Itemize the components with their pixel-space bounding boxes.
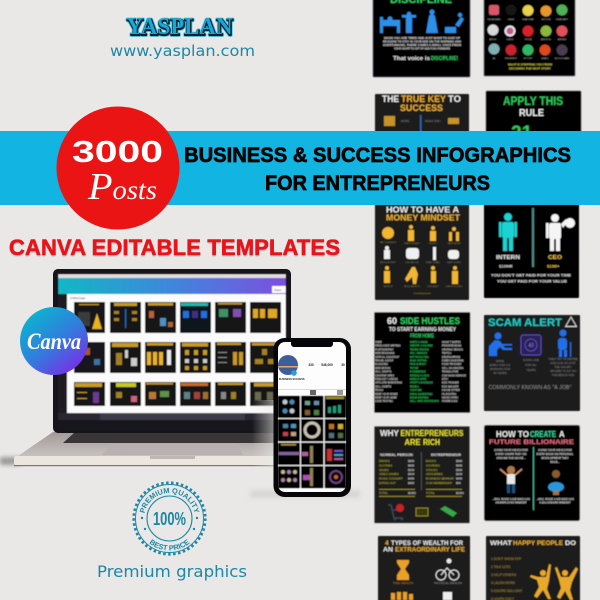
infographic card: why entrepreneurs are rich: $300 — [456, 459, 463, 463]
infographic card: why entrepreneurs are rich: $300 — [408, 464, 415, 468]
infographic card: 60 side hustles: SELL EBOOKS — [410, 352, 427, 355]
infographic card: money mindset: GIVE BACK — [427, 285, 439, 288]
infographic card: what happy people do: HAPPY PEOPLE — [513, 540, 563, 547]
infographic card: future billionaire: HOW TO — [496, 430, 529, 439]
icon: jumping people — [530, 564, 578, 600]
icon: cart — [388, 504, 404, 520]
infographic card: app icons: SLACK — [506, 38, 514, 41]
infographic card: true key to success: WHILE THEY — [425, 119, 441, 123]
infographic card: types of wealth: EXTRAORDINARY LIFE — [395, 546, 466, 554]
infographic card: why entrepreneurs are rich: NORMAL PERSON — [380, 453, 414, 457]
icon: canva circle logo: Canva — [27, 329, 81, 354]
laptop mockup — [0, 269, 292, 466]
phone mockup: BUSINESS SUCCESS — [279, 378, 305, 381]
profile stats — [308, 363, 345, 367]
infographic card: 60 side hustles: PODCAST / VIDEOS — [375, 378, 398, 381]
infographic card: true key to success: THE — [382, 94, 399, 105]
infographic card: scam alert: DOING JOB — [523, 358, 539, 362]
phone mockup — [250, 338, 360, 498]
infographic card: scam alert: THE SALARY — [554, 365, 572, 369]
infographic card: why entrepreneurs are rich: $200 — [408, 459, 415, 463]
infographic card: 60 side hustles: DOG WALKER — [442, 385, 459, 388]
infographic card: 60 side hustles: DROPSHIPPING — [442, 356, 460, 359]
infographic card: what happy people do: 1.DON'T SHOW OFF — [491, 557, 521, 561]
infographic card: 60 side hustles: FREELANCE WRITING — [375, 345, 401, 348]
infographic card: money mindset: BUILD ASSETS — [404, 285, 420, 288]
infographic card: 60 side hustles: MOBILE APPS — [410, 378, 427, 381]
heading: canva editable templates: CANVA EDITABLE TEMPLATES — [9, 236, 340, 262]
infographic card: why entrepreneurs are rich: $50 — [456, 481, 461, 485]
infographic card: 60 side hustles: WEB DESIGNING — [375, 352, 395, 355]
infographic card: why entrepreneurs are rich: TOTAL — [379, 491, 388, 495]
infographic card: discipline: That voice is — [393, 56, 430, 62]
logo: yasplan: YASPLAN — [127, 15, 233, 41]
thumbnail row 3 — [74, 382, 281, 406]
laptop screen: Share — [274, 288, 282, 292]
infographic card: scam alert: AFFORD TO SIT ON — [550, 369, 576, 373]
infographic card: future billionaire: GIVING YOUR KID $10 FOR — [538, 448, 572, 452]
infographic card: types of wealth: 4 — [385, 540, 389, 547]
infographic card: 60 side hustles: PAID SURVEY — [410, 363, 426, 366]
icon: ceo — [546, 214, 575, 251]
infographic card: 60 side hustles: NFT ROYALTIES — [410, 356, 429, 359]
infographic card: 60 side hustles: PHOTOGRAPHY — [375, 348, 394, 351]
infographic card: 60 side hustles: FOREX INVESTING — [442, 360, 464, 362]
infographic card: types of wealth: TYPES OF WEALTH FOR — [391, 540, 463, 547]
infographic card: future billionaire: AN EMPLOYEE MINDSET — [495, 500, 527, 504]
infographic card: 60 side hustles: FILM EXTRA — [442, 393, 457, 396]
infographic card: true key to success: TO — [448, 94, 461, 105]
heading: canva editable templates: CANVA EDITABLE TEMPLATES — [9, 235, 340, 260]
infographic card: discipline: WHEN YOU ARE TIRED AND JUST WANT TO GIVE UP — [384, 36, 460, 40]
profile stats: 330 — [308, 363, 314, 367]
infographic card: intern vs ceo: CEO — [548, 255, 563, 261]
infographic card: app icons: PINTEREST — [505, 58, 518, 60]
dock — [100, 413, 245, 420]
infographic card: what happy people do: 5.IGNORE BULLSHIT — [491, 589, 522, 593]
infographic card: why entrepreneurs are rich: DRINKS — [379, 459, 390, 463]
infographic card: 60 side hustles: CAR WASH SERVICE — [442, 374, 467, 377]
infographic card: why entrepreneurs are rich: VIDEO GAMES — [379, 472, 399, 476]
infographic card: future billionaire: CREATE — [530, 430, 556, 439]
infographic card: 60 side hustles: FOOD TRUCKER — [442, 363, 462, 366]
infographic card: money mindset — [375, 204, 469, 300]
infographic card: scam alert: YEARS — [526, 368, 536, 372]
icon: canva circle logo — [20, 307, 88, 375]
infographic card: discipline — [373, 0, 470, 77]
laptop lid — [53, 269, 291, 433]
caption: premium graphics: Premium graphics — [97, 562, 247, 581]
infographic card: apply this rule: RULE — [519, 107, 544, 119]
infographic card: app icons: ANDROID — [541, 38, 551, 41]
infographic card: why entrepreneurs are rich: SHOES — [379, 468, 389, 472]
infographic card: 60 side hustles: PROOFREADING — [442, 345, 462, 348]
infographic card: future billionaire: AROUND THE HOUSE... — [496, 456, 526, 460]
infographic card: why entrepreneurs are rich: $300 — [456, 468, 463, 472]
infographic card: scam alert: COMMONLY KNOWN AS "A JOB" — [488, 385, 572, 391]
infographic card: future billionaire: READ... — [550, 460, 560, 464]
icon: reading boy — [548, 470, 564, 495]
infographic card: 60 side hustles: MAKE T-SHIRTS — [442, 341, 461, 344]
badge: premium quality seal: 100% — [153, 509, 186, 529]
infographic card: true key to success: TRUE KEY — [401, 94, 447, 105]
infographic card: 60 side hustles: TEACH — [375, 389, 384, 392]
infographic card: 60 side hustles: SELL ASSETS — [375, 385, 392, 388]
infographic card: why entrepreneurs are rich: $300 — [456, 464, 463, 468]
infographic card: scam alert: 40 YEARS — [493, 371, 507, 375]
infographic card: 60 side hustles: ETSY — [442, 378, 449, 381]
infographic card: why entrepreneurs are rich: STOCKS — [426, 468, 438, 472]
infographic card: future billionaire: ...WILL RAISE A KID WHO HAS — [536, 497, 574, 501]
infographic card: 60 side hustles: CODE TESTING — [375, 400, 393, 403]
infographic card: money mindset: HOW TO HAVE A — [386, 206, 459, 214]
logo: yasplan: YASPLAN — [127, 15, 233, 41]
banner heading: FOR ENTREPRENEURS — [265, 171, 490, 195]
infographic card: discipline: DISCIPLINE! — [431, 56, 458, 62]
infographic card: 60 side hustles: DESIGN A LOGO — [410, 374, 429, 377]
infographic card: why entrepreneurs are rich: $400 — [456, 476, 463, 480]
infographic card: app icons: BITCOIN — [542, 19, 551, 21]
infographic card: intern vs ceo — [484, 204, 579, 298]
infographic card: scam alert: SCAM ALERT — [488, 317, 562, 329]
infographic card: true key to success: WORK... — [401, 119, 412, 123]
infographic card: money mindset: START SMALL — [426, 261, 441, 264]
infographic card: scam alert — [484, 315, 580, 411]
infographic card: true key to success — [375, 94, 469, 139]
infographic card: intern vs ceo: $10/HR — [499, 264, 513, 268]
infographic card: why entrepreneurs are rich: ENTREPRENEURS — [400, 429, 464, 438]
infographic card: 60 side hustles: ECOMMERCE — [410, 371, 426, 374]
infographic card: 60 side hustles: UBER — [375, 341, 382, 344]
infographic card: what happy people do: 2.TALK LESS — [491, 565, 510, 569]
infographic card: future billionaire: EVERY BOOK ON PERSONAL — [537, 452, 574, 456]
infographic card: 60 side hustles: AFFILIATE MARKETING — [375, 382, 402, 385]
infographic card: 60 side hustles: VIRTUAL ASSISTANT — [375, 356, 400, 359]
infographic card: 60 side hustles: RENT YOUR HOME — [375, 396, 397, 400]
infographic card: 60 side hustles: TO START EARNING MONEY — [389, 327, 457, 333]
infographic card: why entrepreneurs are rich: EATING OUT — [379, 481, 396, 485]
infographic card: true key to success: SUCCESS — [400, 103, 443, 114]
infographic card: 60 side hustles: FROM HOME — [410, 334, 435, 340]
infographic card: intern vs ceo: $10M+ — [547, 264, 560, 268]
infographic card: discipline: REASONS TO STAY IN YOUR BED ON THE MORNING AND — [383, 40, 461, 44]
phone post grid — [278, 396, 346, 488]
infographic card: why entrepreneurs are rich — [374, 426, 470, 524]
profile stats: 546,000 — [321, 363, 333, 367]
infographic card: why entrepreneurs are rich: BOOKS — [426, 459, 436, 463]
infographic card: scam alert: WORKING FOR — [490, 367, 510, 371]
infographic card: 60 side hustles: TUTOR — [410, 367, 418, 370]
infographic card: 60 side hustles: CONTENT SITES — [375, 374, 395, 377]
infographic card: 60 side hustles: WRITE A BOOK — [410, 341, 428, 344]
infographic card: app icons: BECOMING THE NEXT STORY — [509, 66, 551, 70]
infographic card: what happy people do: 4.LAUGH MORE — [491, 581, 515, 585]
website url: www.yasplan.com — [110, 42, 255, 60]
thumbnail row 1 — [74, 302, 281, 333]
infographic card: 60 side hustles: GRAPHIC DESIGN — [442, 348, 463, 351]
profile picture — [278, 355, 298, 376]
logo: yasplan: YASPLAN — [126, 14, 233, 40]
infographic card: why entrepreneurs are rich: $1450 — [456, 491, 464, 495]
infographic card: why entrepreneurs are rich: $104 — [408, 472, 415, 476]
banner heading: BUSINESS & SUCCESS INFOGRAPHICS — [184, 143, 571, 167]
infographic card: future billionaire: A — [559, 430, 565, 439]
infographic card: why entrepreneurs are rich: RICH — [423, 438, 440, 447]
infographic card: app icons: BEATS — [541, 57, 549, 60]
infographic card: what happy people do: 3.HELP OTHERS — [491, 573, 516, 577]
infographic card: why entrepreneurs are rich: BUSINESS SEMINAR — [426, 476, 454, 480]
infographic card: future billionaire: A BILLIONAIRE MINDSET — [539, 500, 571, 504]
infographic card: why entrepreneurs are rich: $400 — [408, 476, 415, 480]
infographic card: why entrepreneurs are rich: GYM MEMBERSHIP — [426, 481, 452, 485]
infographic card: 60 side hustles: HOUSE SITTER — [442, 389, 460, 392]
infographic card: why entrepreneurs are rich: $100 — [456, 472, 463, 476]
infographic card: money mindset: STAY FOCUSED — [446, 285, 463, 288]
infographic card: money mindset: REDUCE DEBT — [380, 262, 396, 264]
infographic card: future billionaire: EVERY CHORE THEY DO — [496, 452, 526, 456]
infographic card: money mindset: @wealthymindset — [413, 292, 431, 295]
infographic card: app icons: AIRBNB — [558, 38, 567, 41]
laptop base — [15, 432, 290, 458]
infographic card: 60 side hustles: MOVIE CRITIC — [442, 396, 459, 400]
infographic card: 60 side hustles: SELL CRAFTS — [375, 371, 392, 374]
infographic card: app icons: TESLA — [525, 38, 532, 41]
infographic card: types of wealth: AN — [383, 546, 393, 554]
infographic card: scam alert: 40 — [528, 343, 534, 349]
infographic card: 60 side hustles: TRANSLATOR — [442, 371, 459, 374]
laptop shadow — [0, 457, 20, 465]
infographic card: why entrepreneurs are rich: TOTAL — [426, 491, 435, 495]
infographic card: apply this rule: APPLY THIS — [503, 96, 563, 108]
infographic card: 60 side hustles: BABY SITTING — [410, 360, 427, 362]
infographic card: why entrepreneurs are rich: WHY — [380, 429, 400, 438]
infographic card: apply this rule — [486, 91, 581, 144]
infographic card: 60 side hustles: YOUTUBE — [410, 389, 422, 392]
infographic card: scam alert: THE BENCH AND — [552, 373, 574, 377]
infographic card: why entrepreneurs are rich: MUSIC CONCERT — [379, 476, 403, 480]
infographic card: types of wealth: PHYSICAL WEALTH — [434, 581, 462, 585]
thumbnail row 2 — [74, 342, 281, 373]
icon: hourglass — [397, 560, 409, 580]
infographic card: app icons: AI — [493, 57, 495, 60]
infographic card: scam alert: AND LIVE ON JUST — [550, 361, 576, 365]
infographic card: discipline: YOUR HEART TO GET UP AND PUSH FORWARD — [394, 46, 450, 50]
banner heading — [184, 143, 571, 195]
infographic card: money mindset: BE RICH — [384, 286, 393, 288]
infographic card: 60 side hustles: TRAVEL AGENT — [375, 360, 394, 362]
infographic card: 60 side hustles: CREATE A COURSE — [410, 345, 433, 348]
icon: intern — [499, 213, 517, 251]
infographic card: why entrepreneurs are rich: CLOTHES — [379, 464, 392, 468]
infographic card: money mindset: PAY YOURSELF — [380, 241, 397, 244]
infographic card: why entrepreneurs are rich: COURSES — [426, 464, 440, 468]
infographic card: app icons: SNAPCHAT — [522, 18, 535, 21]
infographic card: intern vs ceo: YOU DON'T GET PAID FOR YOUR TIME — [491, 274, 572, 278]
infographic card: money mindset: TRACK MONEY — [404, 242, 421, 245]
infographic card: 60 side hustles: SIDE HUSTLES — [400, 316, 460, 326]
infographic card: 60 side hustles: TRADE STOCKS — [410, 348, 429, 351]
infographic card: money mindset: INVEST — [429, 243, 438, 245]
infographic card: money mindset: LIVE BELOW — [405, 262, 420, 264]
infographic card: intern vs ceo: YOU GET PAID FOR YOUR VALUE — [497, 280, 568, 284]
infographic card: why entrepreneurs are rich: $1450 — [408, 491, 416, 495]
badge: 3000 posts — [56, 106, 180, 230]
infographic card: discipline: OVERTHINKING, THERE COMES A SMALL VOICE FROM — [383, 43, 461, 47]
infographic card: apply this rule: 21 — [511, 123, 533, 144]
badge: 3000 posts: 3000 — [72, 134, 163, 169]
infographic card: types of wealth — [378, 536, 470, 600]
infographic card: why entrepreneurs are rich: ENTREPRENEUR — [431, 453, 462, 457]
icon: cyclist — [436, 568, 459, 580]
infographic card: app icons: SPOTIFY — [523, 58, 533, 60]
badge: premium quality seal: BEST PRICE — [149, 539, 190, 551]
infographic card: app icons: INSTAGRAM — [488, 18, 501, 21]
infographic card: why entrepreneurs are rich: $150 — [408, 468, 415, 472]
badge: premium quality seal — [132, 481, 207, 556]
infographic card: 60 side hustles: WEB DESIGN — [375, 367, 391, 370]
infographic card: app icons: BLOCKCHAIN — [555, 57, 570, 60]
profile stats: 30 — [341, 363, 345, 367]
infographic card: scam alert: THEN TRY TO RETIRE — [548, 357, 578, 361]
infographic card: 60 side hustles: EMAIL MARKETING — [410, 393, 433, 396]
infographic card: 60 side hustles: START A BUSINESS — [410, 382, 433, 385]
icon: boy — [500, 466, 522, 493]
infographic card: scam alert: FOR 40+ — [525, 363, 537, 367]
infographic card: app icons: APPLE — [489, 38, 497, 41]
infographic card: why entrepreneurs are rich: $300 — [408, 481, 415, 485]
infographic card: 60 side hustles: SELL USED TEXTBOOKS — [410, 400, 439, 403]
infographic card: money mindset: SAVE MORE — [448, 242, 461, 245]
infographic card: app icons: WHATSAPP — [556, 18, 569, 21]
infographic card: 60 side hustles — [374, 312, 470, 413]
infographic card: 60 side hustles: RESELL — [410, 385, 420, 388]
infographic card: future billionaire — [484, 425, 580, 521]
infographic card: 60 side hustles: BLOGGING — [375, 363, 388, 366]
infographic card: 60 side hustles: TWITCH — [442, 352, 452, 355]
infographic card: 60 side hustles: SELL ON AMAZON — [442, 367, 464, 370]
infographic card: why entrepreneurs are rich: ARE — [404, 438, 420, 447]
infographic card: scam alert: EARLY AND GO — [490, 363, 511, 367]
badge: premium quality seal: PREMIUM QUALITY — [140, 488, 200, 513]
infographic card: scam alert: WAKE — [496, 359, 504, 363]
infographic card: future billionaire: DEVELOPMENT THEY — [541, 456, 569, 460]
infographic card: 60 side hustles: 60 — [387, 316, 397, 326]
laptop screen: Untitled page — [70, 296, 86, 300]
infographic card: future billionaire: ...WILL RAISE A KID WHO HAS — [492, 497, 530, 501]
infographic card: 60 side hustles: RENT YOUR SPARE — [375, 393, 398, 396]
infographic card: app icons: UBER — [508, 19, 514, 21]
infographic card: future billionaire: FUTURE BILLIONAIRE — [489, 439, 575, 446]
infographic card: intern vs ceo: INTERN — [496, 255, 520, 261]
infographic card: 60 side hustles: FIVERR GIGS — [442, 400, 458, 403]
banner band — [0, 131, 600, 205]
infographic card: what happy people do: DO — [565, 540, 576, 547]
infographic card: future billionaire: GIVING YOUR KID $10 FOR — [494, 448, 528, 452]
infographic card: types of wealth: TIME WEALTH — [393, 581, 413, 585]
infographic card: what happy people do: WHAT — [490, 540, 513, 547]
infographic card: 60 side hustles: BOOK KEEPING — [410, 396, 429, 400]
infographic card: app icons: WHAT IS STOPPING YOU FROM — [508, 62, 552, 66]
laptop screen — [58, 274, 286, 432]
infographic card: app icons — [484, 0, 575, 76]
badge: 3000 posts: Posts — [87, 166, 157, 208]
canva toolbar — [58, 278, 286, 294]
infographic card: 60 side hustles: DOG TRAINER — [442, 382, 459, 385]
infographic card: why entrepreneurs are rich: GROCERIES — [426, 472, 443, 476]
infographic card: money mindset: MONEY MINDSET — [386, 214, 460, 223]
infographic card: what happy people do — [486, 536, 580, 600]
infographic card: money mindset: KEEP GOING — [447, 262, 461, 264]
